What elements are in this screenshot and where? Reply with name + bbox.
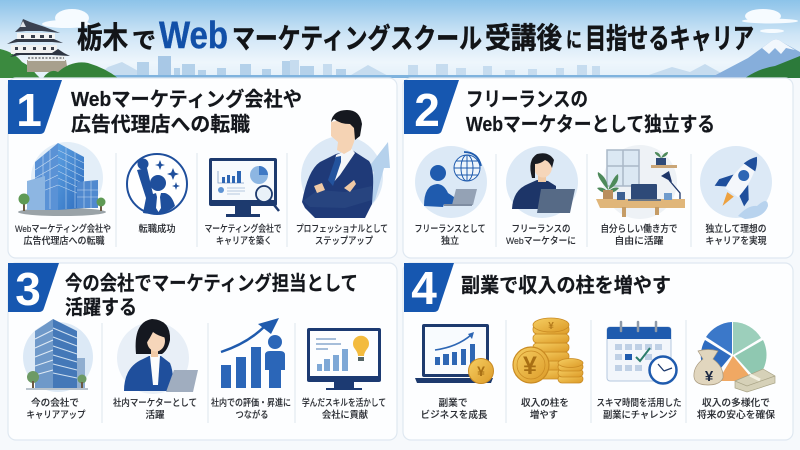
large yen coin: ¥ (523, 352, 537, 380)
title: 栃木 (77, 22, 128, 55)
captions panel 3: 学んだスキルを活かして (302, 397, 386, 409)
cash bundle (735, 369, 775, 392)
water line (100, 75, 740, 78)
title: Web (159, 15, 228, 57)
icon: office building (18, 142, 106, 216)
captions panel 4: 収入の柱を (521, 397, 569, 409)
title: マーケティングスクール (232, 22, 482, 54)
captions panel 2: フリーランスとして (414, 224, 486, 235)
icon: job change success (127, 154, 187, 214)
captions panel 1: マーケティング会社で (204, 223, 282, 235)
green hills left (0, 49, 40, 78)
captions panel 3: 社内マーケターとして (113, 397, 197, 409)
captions panel 1: 転職成功 (138, 223, 176, 235)
small coin stack (558, 358, 583, 383)
title: 受講後 (485, 22, 562, 55)
green trees (43, 62, 118, 78)
heading 4: 副業で収入の柱を増やす (461, 274, 671, 297)
panel 2 (403, 78, 793, 258)
icon: home office desk (596, 145, 685, 219)
magnifier (256, 186, 279, 211)
panel 3 (8, 263, 397, 440)
cloud left (42, 9, 90, 28)
yen coin: ¥ (477, 363, 485, 379)
number badge 3: 3 (15, 263, 41, 315)
captions panel 2: フリーランスの (512, 224, 570, 235)
captions panel 4: 将来の安心を確保 (697, 409, 775, 421)
green hills right (745, 56, 800, 78)
captions panel 1: 広告代理店への転職 (24, 235, 105, 247)
icon: gold coin stacks (513, 318, 583, 383)
captions panel 1: プロフェッショナルとして (296, 224, 388, 235)
clock (650, 356, 676, 384)
captions panel 4: 副業で (438, 397, 468, 409)
icon: professional businessman (301, 110, 390, 218)
panel 4 (403, 262, 793, 440)
icon: freelance web marketer (506, 146, 578, 218)
captions panel 2: キャリアを実現 (706, 235, 767, 247)
icon: gold coin stacks: ¥ (548, 321, 554, 332)
captions panel 2: 自分らしい働き方で (600, 223, 678, 235)
captions panel 4: 増やす (530, 409, 558, 421)
title: で (132, 27, 156, 53)
captions panel 1 (15, 223, 388, 247)
number badge 1 (8, 80, 62, 136)
icon: growth chart with person (221, 318, 285, 388)
panel 1 (8, 78, 397, 258)
title (77, 15, 754, 57)
heading 1: 広告代理店への転職 (71, 113, 250, 136)
icon: income pie chart (694, 322, 775, 392)
number badge 2 (404, 80, 459, 136)
heading 2: フリーランスの (466, 89, 588, 111)
captions panel 2: 独立して理想の (706, 223, 766, 235)
desk (596, 199, 685, 217)
mount fuji (710, 40, 800, 78)
number badge 3 (8, 263, 59, 315)
globe (454, 152, 481, 181)
heading 3 (65, 271, 358, 319)
captions panel 4 (420, 397, 775, 421)
header background (0, 0, 800, 78)
title: に (566, 29, 582, 52)
captions panel 1: Webマーケティング会社や (15, 223, 111, 235)
icon: freelancer with globe (415, 146, 487, 218)
tree right (96, 198, 106, 211)
number badge 2: 2 (414, 84, 440, 136)
captions panel 2: Webマーケターに (506, 235, 576, 247)
icon: rocket (700, 146, 772, 219)
heading 2 (466, 89, 715, 136)
tree left (18, 194, 30, 211)
captions panel 3: つながる (236, 409, 268, 421)
captions panel 3: キャリアアップ (26, 410, 86, 421)
icon: in-house marketer woman (117, 319, 198, 394)
number badge 4: 4 (411, 262, 437, 314)
captions panel 4: 副業にチャレンジ (603, 409, 677, 421)
captions panel 2: 自由に活躍 (614, 235, 664, 247)
heading 3: 今の会社でマーケティング担当として (65, 271, 358, 295)
heading 1: Webマーケティング会社や (71, 87, 302, 111)
captions panel 4: スキマ時間を活用した (596, 397, 682, 409)
potted plant (597, 172, 619, 199)
icon: company building (23, 319, 93, 392)
heading 1 (71, 87, 302, 136)
captions panel 2 (414, 223, 767, 247)
captions panel 3: 今の会社で (31, 397, 79, 409)
heading 3: 活躍する (65, 296, 137, 319)
captions panel 2: 独立 (441, 235, 459, 247)
icon: monitor with analytics (209, 158, 279, 217)
number badge 1: 1 (16, 84, 42, 136)
heading 2: Webマーケターとして独立する (466, 113, 715, 136)
number badge 4 (404, 262, 454, 314)
icon: monitor with lightbulb (307, 328, 381, 390)
captions panel 3: 社内での評価・昇進に (211, 397, 291, 409)
captions panel 4: 収入の多様化で (702, 397, 770, 409)
icon: laptop with yen coin (415, 324, 494, 384)
captions panel 3 (26, 397, 386, 421)
captions panel 3: 会社に貢献 (322, 409, 368, 421)
captions panel 1: キャリアを築く (216, 235, 272, 247)
captions panel 3: 活躍 (146, 409, 165, 421)
captions panel 4: ビジネスを成長 (420, 409, 488, 421)
captions panel 1: ステップアップ (315, 236, 373, 247)
icon: castle (7, 19, 70, 72)
icon: calendar with clock (607, 322, 676, 384)
city skyline (95, 56, 730, 78)
cloud right (742, 9, 798, 33)
money bag: ¥ (705, 368, 714, 385)
